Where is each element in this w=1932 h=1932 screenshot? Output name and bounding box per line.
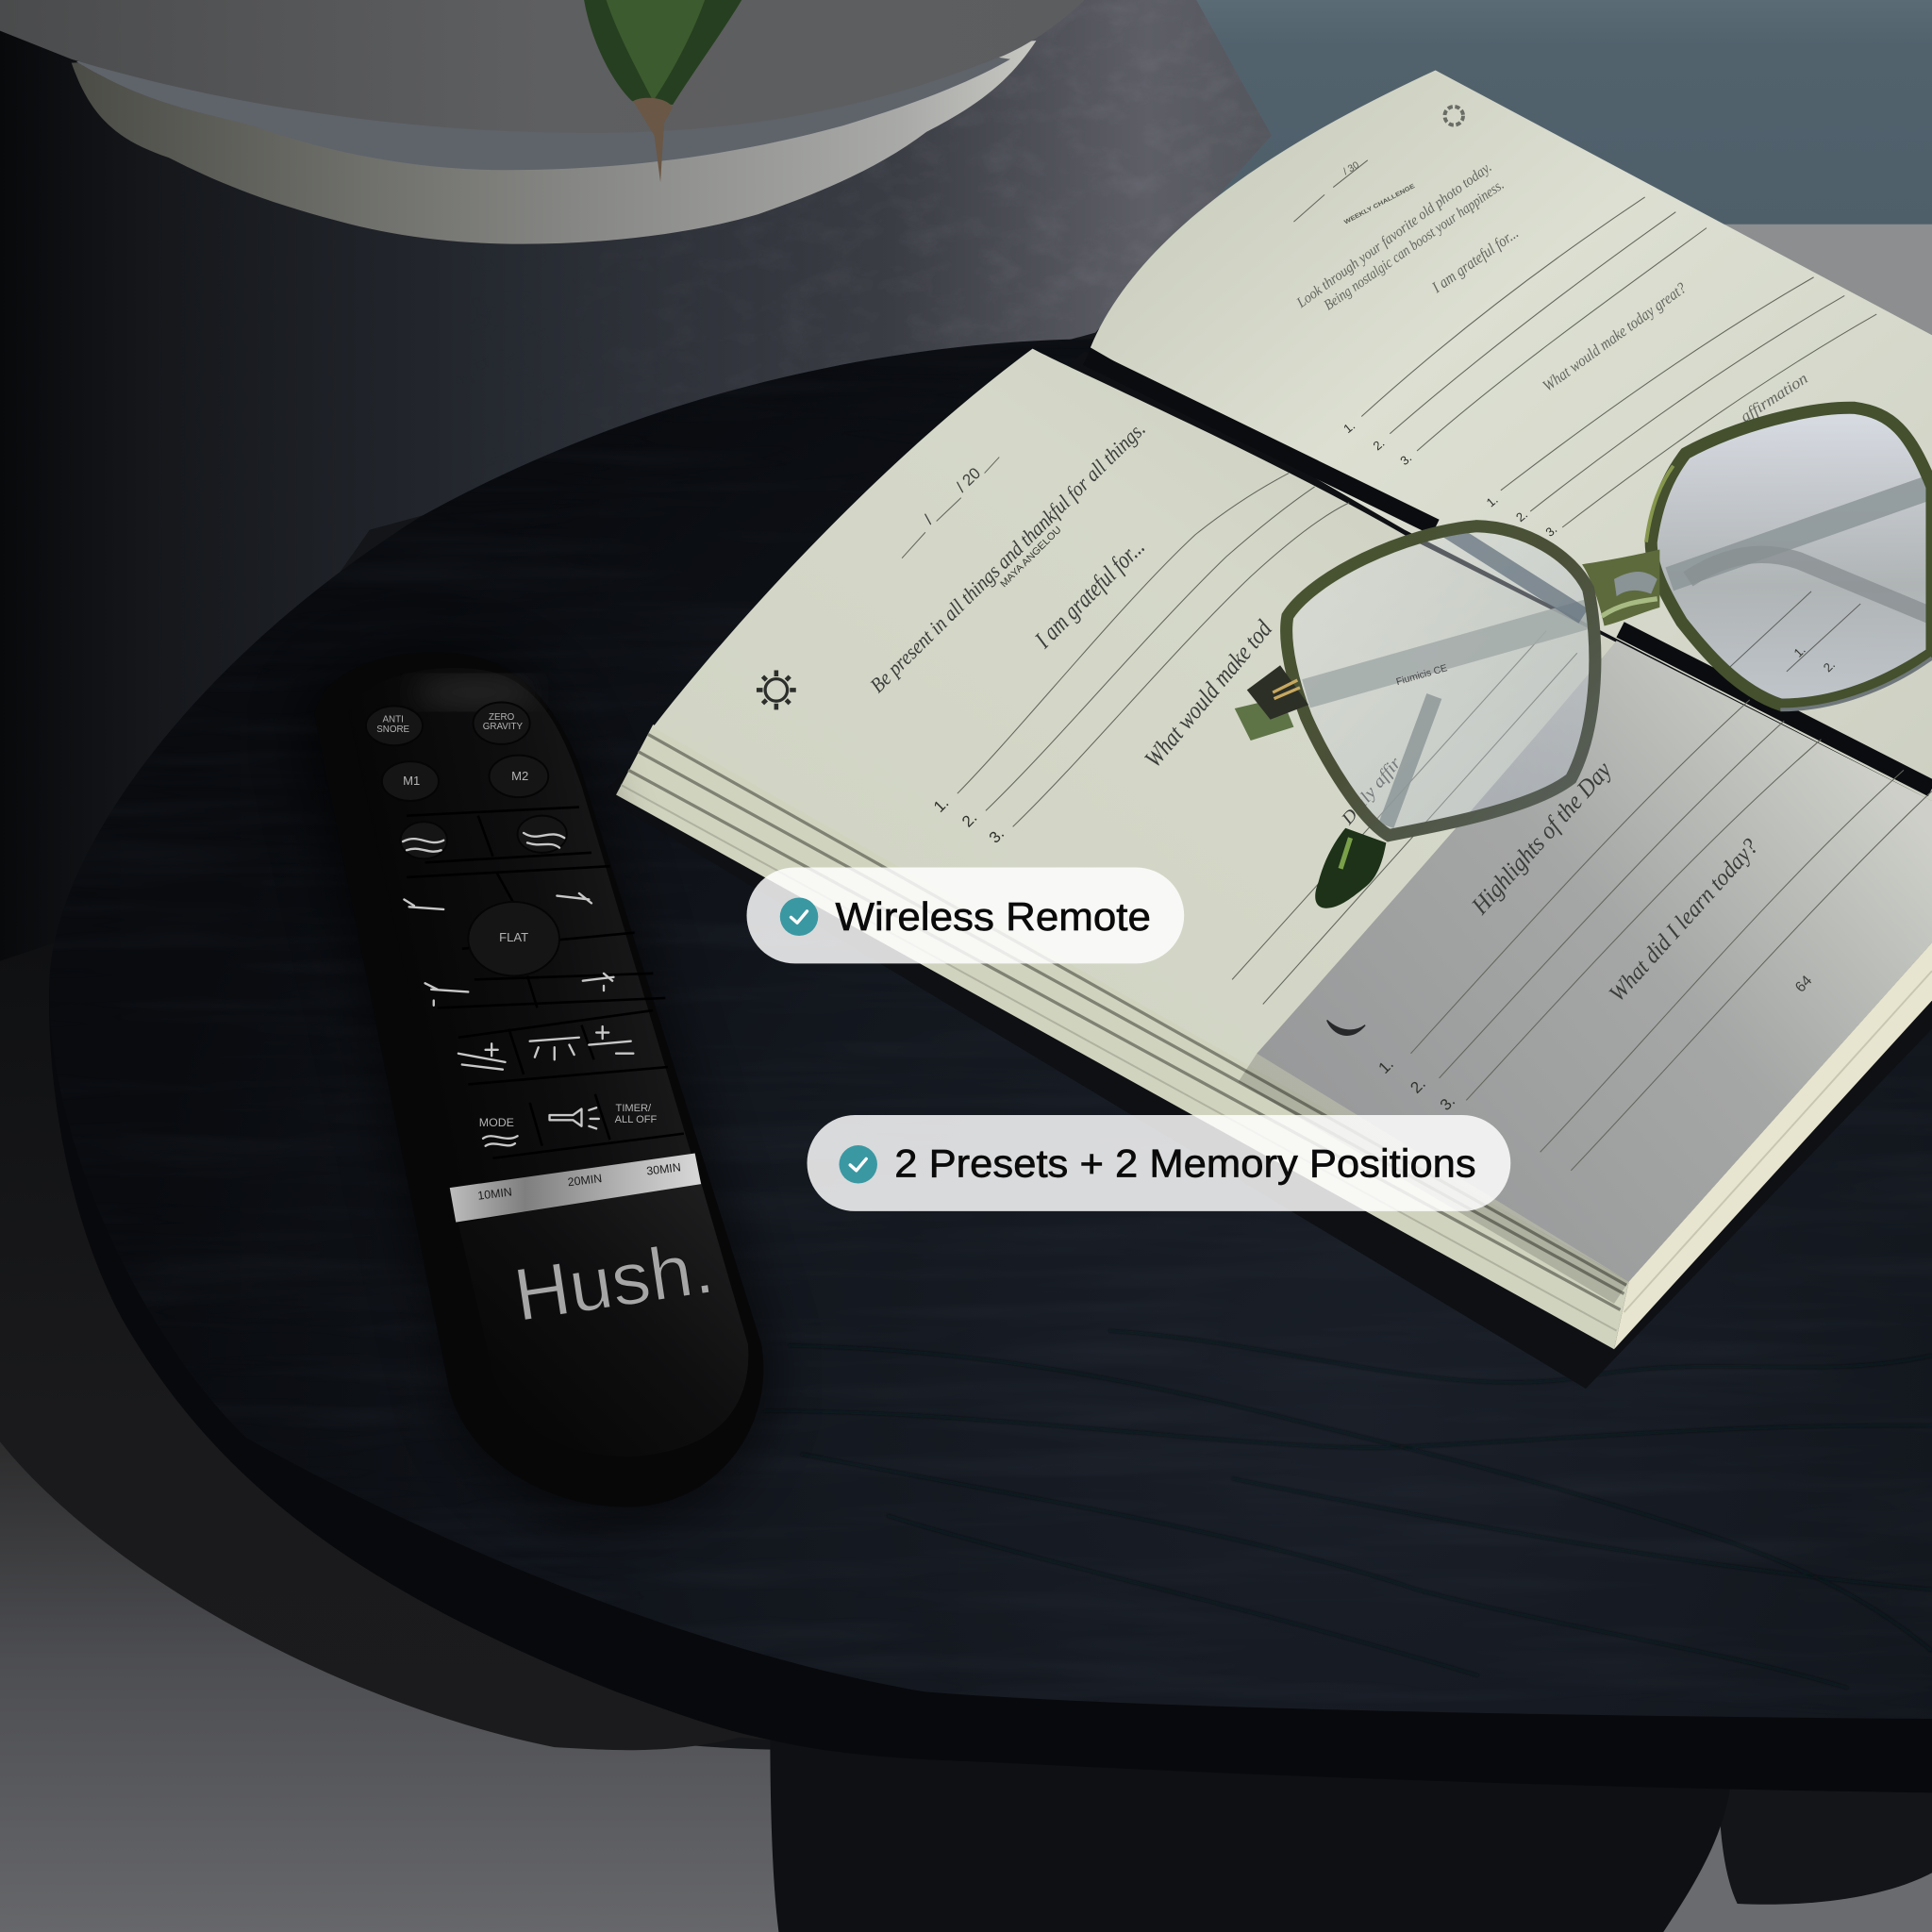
remote face [347, 668, 748, 1457]
page text: 1. [930, 793, 952, 816]
page text: 2. [1407, 1074, 1429, 1097]
icon: sun [757, 671, 796, 709]
hinge [1235, 665, 1308, 741]
button labels: FLAT [499, 930, 528, 944]
brand logo: Hush. [508, 1225, 719, 1337]
remote body [314, 652, 763, 1507]
page text: WEEKLY CHALLENGE [1343, 183, 1417, 225]
open journal [600, 70, 1932, 1389]
right lens: 1. [1790, 642, 1808, 660]
page text: 3. [986, 824, 1008, 847]
top sheen [413, 676, 536, 708]
evening shaded page [1257, 641, 1932, 1281]
bridge [1582, 550, 1659, 626]
page text: Being nostalgic can boost your happiness. [1322, 176, 1507, 313]
planter bowl body [0, 0, 1084, 133]
page text: 1. [1341, 419, 1357, 436]
icon: teal check [780, 898, 818, 936]
page text: What would make today great? [1540, 278, 1690, 395]
right lens [1646, 408, 1932, 709]
page text: Daily affir [1337, 753, 1405, 829]
right lens: 2. [1821, 658, 1838, 675]
page text: Look through your favorite old photo today. [1293, 159, 1494, 311]
timer labels [477, 1160, 681, 1203]
timer labels: 30MIN [646, 1160, 681, 1178]
planter saucer ring [72, 41, 1036, 244]
button labels: MODE [479, 1116, 514, 1129]
page text: affirmation [1737, 369, 1811, 425]
callout: Wireless Remote [747, 868, 1184, 963]
book cover [600, 351, 1932, 1389]
page text: What would make tod [1140, 615, 1278, 773]
button labels: M1 [403, 774, 420, 788]
button labels: ANTI [383, 714, 404, 724]
page text: Highlights of the Day [1466, 756, 1617, 920]
page text: 2. [1513, 508, 1530, 525]
side table top [0, 333, 1932, 1792]
button labels: TIMER/ [616, 1103, 652, 1114]
remote lower face [458, 1183, 748, 1457]
page text: 3. [1397, 451, 1414, 468]
page text: / 20 [953, 464, 984, 495]
table surface [49, 339, 1932, 1719]
timer labels: 10MIN [477, 1185, 513, 1203]
page text: 2. [1371, 436, 1388, 453]
temple arms through lens [1670, 487, 1932, 705]
main stem [770, 1725, 1731, 1932]
page text: 3. [1437, 1092, 1458, 1114]
callout: Wireless Remote: Wireless Remote [836, 894, 1151, 939]
page text: / [921, 511, 936, 527]
left lens [1302, 533, 1589, 828]
left frame [1287, 526, 1595, 836]
page text: MAYA ANGELOU [999, 525, 1064, 590]
callout: 2 Presets + 2 Memory Positions [808, 1115, 1510, 1211]
page text: What did I learn today? [1605, 834, 1764, 1007]
icon: teal check [839, 1145, 877, 1184]
page text: 64 [1792, 973, 1816, 995]
temple arms through lens [1306, 530, 1590, 825]
callout: 2 Presets + 2 Memory Positions: 2 Presets + 2 Memory Positions [894, 1141, 1476, 1185]
lower left page [653, 349, 1932, 1281]
button labels: GRAVITY [483, 722, 523, 732]
left lens: Fiumicis CE [1395, 663, 1449, 688]
page text: 1. [1374, 1055, 1397, 1077]
page text [865, 159, 1816, 1114]
control icons [403, 833, 633, 1146]
side table base [770, 1725, 1932, 1932]
wood grain lines [764, 1331, 1932, 1688]
stone planter bowl [0, 0, 1084, 244]
temple tip [1315, 828, 1386, 908]
table edge [49, 986, 1932, 1792]
page text: / 30 [1341, 160, 1361, 177]
icon: moon [1327, 1020, 1365, 1035]
remote shadow [295, 646, 774, 1528]
page text: 1. [1484, 492, 1501, 509]
timer labels: 20MIN [567, 1172, 603, 1189]
page text: I am grateful for... [1428, 224, 1522, 297]
eyeglasses [1235, 408, 1932, 908]
timer band [450, 1154, 701, 1223]
page text: 2. [958, 808, 980, 831]
icon: small sun [1444, 107, 1463, 125]
upper right page [1091, 70, 1932, 801]
under-table disc shadow [0, 937, 770, 1750]
ribbon gutter [1087, 358, 1932, 789]
button labels [376, 712, 657, 1129]
round buttons [366, 702, 567, 975]
page stack edge [616, 724, 1932, 1349]
button labels: ZERO [489, 712, 515, 723]
page text: 3. [1542, 522, 1559, 540]
page text: Be present in all things and thankful for all things. [865, 417, 1150, 697]
stone pedestal [0, 0, 1272, 960]
button labels: ALL OFF [615, 1114, 657, 1125]
button labels: SNORE [376, 724, 410, 735]
row dividers [407, 808, 684, 1158]
plant leaf [584, 0, 741, 182]
wireless remote control [295, 646, 774, 1528]
planter band [76, 37, 1010, 170]
ruled lines [902, 160, 1932, 1171]
page text: I am grateful for... [1029, 533, 1150, 654]
button labels: M2 [511, 769, 528, 783]
base rear block [1719, 1780, 1932, 1905]
